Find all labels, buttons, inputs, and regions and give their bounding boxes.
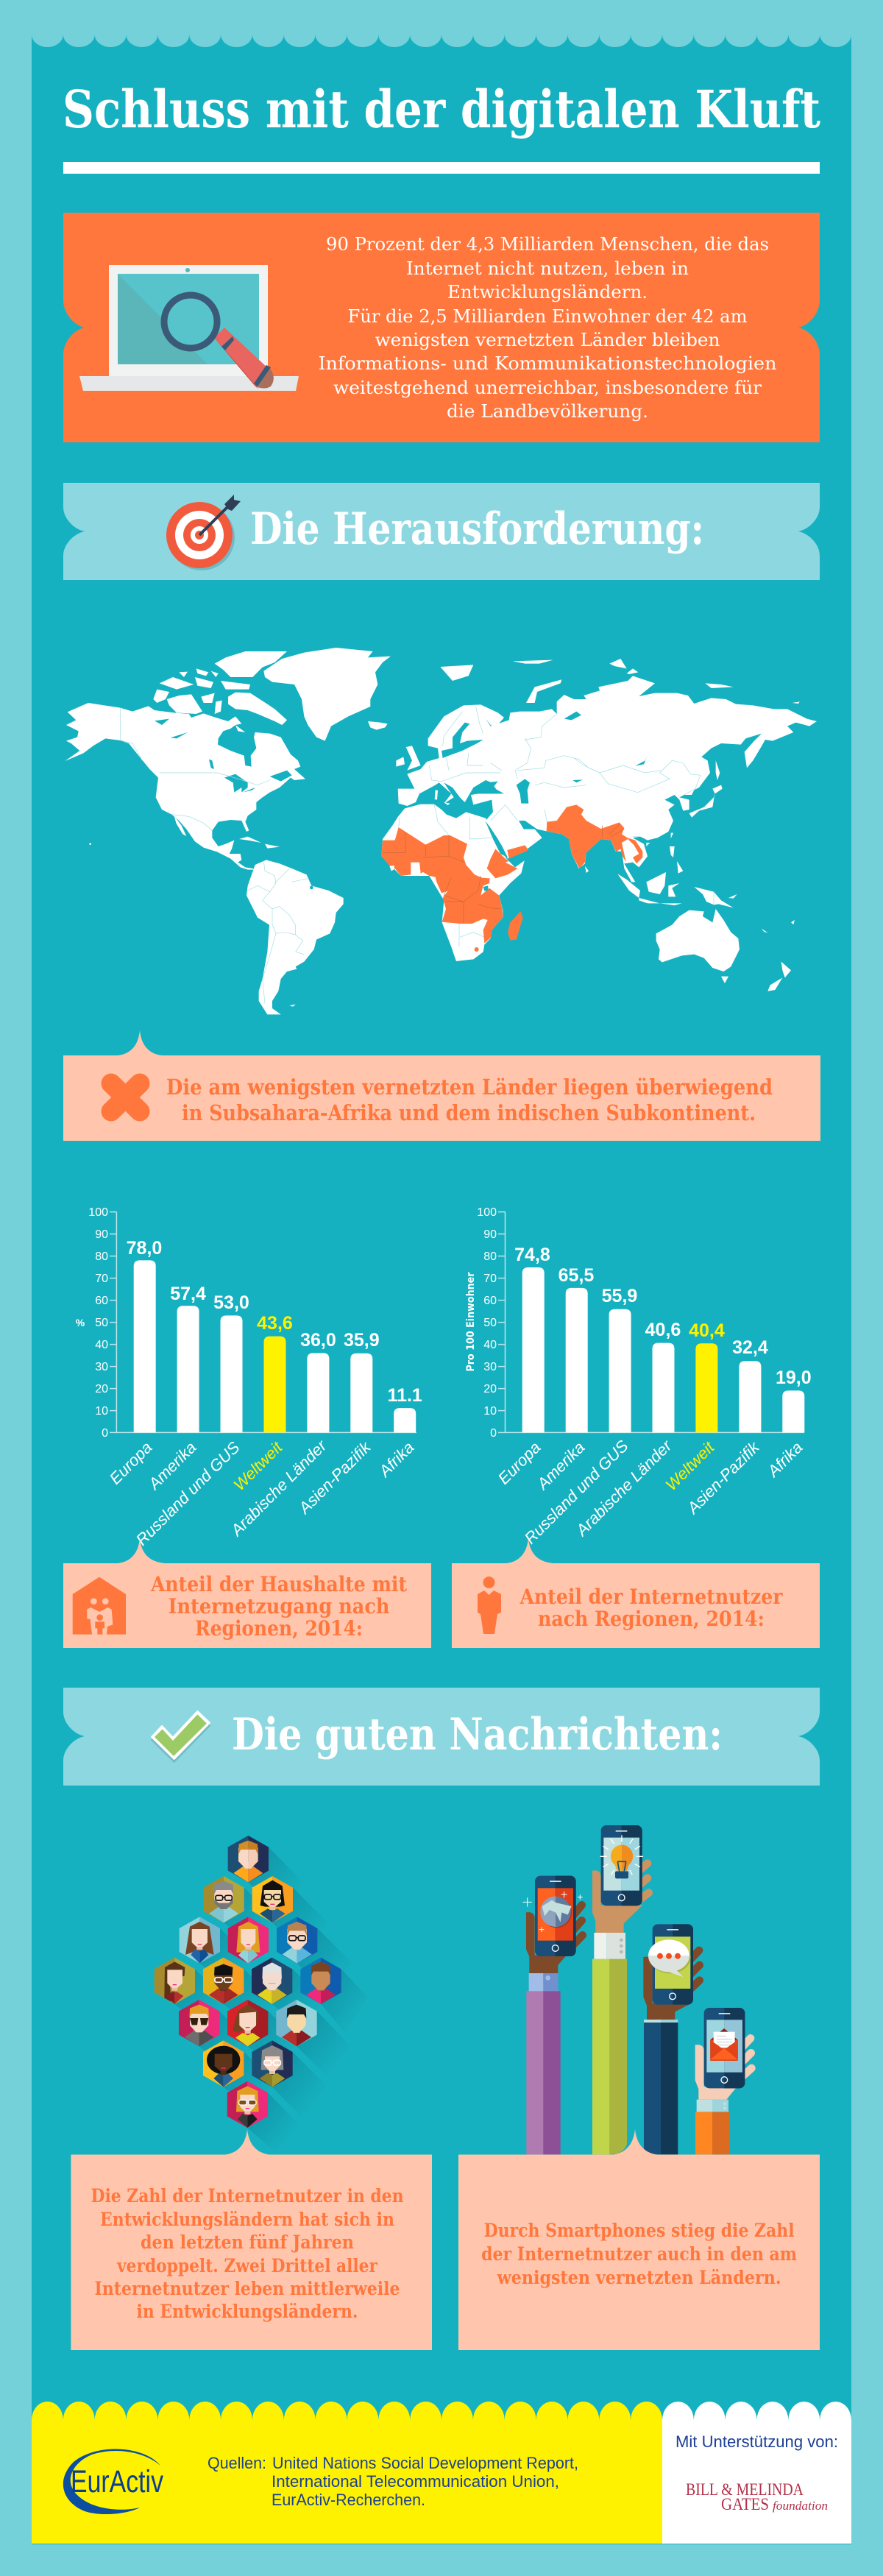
values: 19,0 [776, 1367, 812, 1388]
values [127, 1238, 422, 1406]
icon: laptop with magnifier [79, 265, 299, 391]
text: sources: Quellen: [208, 2454, 266, 2472]
values: 36,0 [300, 1330, 336, 1351]
text: households: Regionen, 2014: [195, 1616, 363, 1641]
person 10 [300, 1958, 341, 2004]
bars [522, 1267, 804, 1432]
bars [134, 1260, 416, 1432]
category labels: Afrika [763, 1438, 806, 1482]
category labels: Russland und GUS [132, 1438, 244, 1549]
world map [65, 648, 817, 1014]
text: map finding: Die am wenigsten vernetzten Länder liegen überwiegend [166, 1075, 773, 1100]
text: intro: weitestgehend unerreichbar, insbesondere für [333, 378, 762, 398]
person 4 [180, 1917, 220, 1964]
values: 43,6 [257, 1313, 293, 1334]
text: intro: Entwicklungsländern. [447, 282, 648, 302]
axis labels: 80 [483, 1250, 497, 1263]
person 1 [228, 1836, 269, 1882]
text: intro: Informations- und Kommunikationstechnologien [318, 353, 777, 374]
axis unit: % [76, 1317, 85, 1328]
text: internet users: Anteil der Internetnutzer [519, 1585, 783, 1609]
category labels: Amerika [143, 1438, 200, 1494]
text: households: Internetzugang nach [168, 1594, 390, 1618]
values: 35,9 [344, 1330, 380, 1351]
callout: map finding [63, 1030, 820, 1141]
category labels [494, 1436, 806, 1548]
axis labels: 80 [95, 1250, 108, 1263]
values: 40,4 [689, 1320, 725, 1341]
values: 55,9 [602, 1286, 637, 1306]
values: 32,4 [732, 1337, 768, 1358]
arm: purple with globe phone [523, 1876, 583, 2154]
top scallop border [32, 33, 851, 47]
axis labels: 60 [95, 1295, 108, 1307]
axis labels: 70 [95, 1273, 108, 1285]
footer [32, 2402, 851, 2544]
axis labels: 10 [483, 1405, 497, 1418]
callout: households [63, 1538, 431, 1648]
axis labels: 0 [490, 1427, 497, 1440]
map: highlighted African countries [381, 827, 528, 952]
axis labels: 40 [483, 1339, 497, 1351]
illustration: raised hands with phones [523, 1825, 751, 2154]
category labels: Arabische Länder [572, 1436, 676, 1540]
footer: white sponsor band [662, 2402, 851, 2544]
category labels [106, 1436, 418, 1549]
category labels: Europa [106, 1438, 156, 1488]
heading: Die guten Nachrichten [63, 1688, 820, 1786]
values: 40,6 [645, 1320, 681, 1340]
axis labels: 60 [483, 1295, 497, 1307]
values: 74,8 [514, 1245, 550, 1265]
category labels: Weltweit [662, 1437, 718, 1494]
text: sources [208, 2454, 578, 2509]
values: 65,5 [558, 1265, 594, 1286]
axis labels: 70 [483, 1273, 497, 1285]
logo: Gates foundation: GATES [721, 2495, 769, 2513]
text: internet users [519, 1585, 783, 1631]
person 7 [155, 1958, 195, 2004]
axis labels: 30 [95, 1361, 108, 1373]
text: sources: United Nations Social Development Report, [272, 2454, 578, 2472]
values [514, 1245, 812, 1388]
person 5 [228, 1917, 269, 1964]
axis labels [88, 1206, 108, 1440]
axis labels: 20 [95, 1383, 108, 1395]
panel: text right [458, 2129, 820, 2350]
person 2 [203, 1876, 244, 1922]
long shadows [174, 1847, 368, 2154]
text: doubled users: in Entwicklungsländern. [137, 2301, 358, 2322]
illustration: people hexagons [155, 1836, 368, 2154]
icon: person [478, 1577, 501, 1634]
arm: orange with mail phone [695, 2008, 751, 2154]
text: smartphones: Durch Smartphones stieg die Zahl [484, 2220, 795, 2241]
text: doubled users [91, 2185, 403, 2322]
heading: Die Herausforderung: Die Herausforderung: [250, 503, 704, 555]
axis labels: 0 [102, 1427, 108, 1440]
title: Schluss mit der digitalen Kluft [63, 79, 820, 140]
values: 53,0 [213, 1292, 249, 1313]
person 16 [227, 2081, 268, 2128]
axis labels: 50 [483, 1317, 497, 1329]
person 13 [276, 2000, 317, 2046]
text: map finding [166, 1075, 773, 1125]
text: sources: EurActiv-Recherchen. [272, 2491, 425, 2509]
logo: Gates foundation [686, 2480, 828, 2513]
map: highlighted South and Southeast Asia [547, 804, 642, 868]
text: internet users: nach Regionen, 2014: [538, 1607, 765, 1631]
map: the Americas and Greenland [65, 648, 391, 1014]
text: intro: Für die 2,5 Milliarden Einwohner der 42 am [347, 306, 748, 327]
axes [498, 1212, 804, 1432]
logo: EurActiv [63, 2449, 163, 2514]
text: doubled users: Die Zahl der Internetnutzer in den [91, 2185, 403, 2207]
icon: house with family [73, 1577, 126, 1635]
chart: households with internet access [76, 1206, 422, 1549]
footer: yellow sources band [32, 2402, 662, 2544]
category labels: Asien-Pazifik [294, 1437, 375, 1518]
axis labels: 90 [483, 1228, 497, 1241]
panel: intro [63, 213, 820, 442]
axis labels: 90 [95, 1228, 108, 1241]
text: intro [318, 234, 777, 422]
text: smartphones: wenigsten vernetzten Ländern. [497, 2267, 781, 2288]
person 15 [252, 2040, 293, 2087]
person 12 [227, 2000, 268, 2046]
category labels: Russland und GUS [521, 1437, 632, 1548]
text: map finding: in Subsahara-Afrika und dem indischen Subkontinent. [182, 1100, 756, 1125]
text: doubled users: den letzten fünf Jahren [141, 2232, 354, 2253]
heading: Die Herausforderung [63, 483, 820, 580]
panel: text left [71, 2129, 432, 2350]
map: East Asia and Oceania [547, 659, 800, 991]
person 11 [179, 2000, 219, 2046]
axis labels: 100 [88, 1206, 108, 1219]
logo: Gates foundation: BILL & MELINDA [686, 2480, 804, 2499]
icon: orange X [111, 1083, 140, 1111]
text: intro: wenigsten vernetzten Länder bleiben [375, 330, 720, 350]
person 9 [252, 1958, 292, 2004]
callout: internet users [452, 1538, 820, 1648]
text: intro: 90 Prozent der 4,3 Milliarden Menschen, die das [326, 234, 769, 255]
category labels: Amerika [532, 1438, 589, 1494]
person 14 [203, 2040, 244, 2087]
category labels: Arabische Länder [227, 1436, 331, 1540]
text: intro: die Landbevölkerung. [447, 401, 648, 422]
arm: green with bulb phone [592, 1825, 649, 2154]
values: 57,4 [170, 1284, 206, 1304]
title rule [63, 162, 820, 174]
person 3 [252, 1876, 293, 1922]
values: 11.1 [388, 1385, 422, 1406]
text: households [150, 1572, 407, 1641]
text: doubled users: Entwicklungsländern hat sich in [100, 2209, 394, 2230]
text: smartphones [481, 2220, 797, 2288]
person 6 [277, 1917, 317, 1964]
text: doubled users: verdoppelt. Zwei Drittel aller [116, 2255, 378, 2276]
axis labels: 40 [95, 1339, 108, 1351]
axis labels: 10 [95, 1405, 108, 1418]
logo: Gates foundation: foundation [773, 2499, 828, 2513]
axis labels: 100 [477, 1206, 497, 1219]
category labels: Europa [494, 1438, 545, 1488]
logo: EurActiv: EurActiv [71, 2464, 163, 2499]
category labels: Asien-Pazifik [683, 1437, 763, 1518]
axes [110, 1212, 416, 1432]
icon: target [166, 495, 241, 570]
category labels: Weltweit [230, 1437, 286, 1494]
heading: Die guten Nachrichten: Die guten Nachrichten: [232, 1709, 723, 1761]
map: Eurasia and Africa [368, 660, 817, 961]
text: smartphones: der Internetnutzer auch in den am [481, 2243, 797, 2265]
chart: internet users [465, 1206, 812, 1548]
text: intro: Internet nicht nutzen, leben in [406, 258, 689, 279]
arm: navy with chat phone [643, 1924, 700, 2154]
values: 78,0 [127, 1238, 162, 1259]
axis labels [477, 1206, 497, 1440]
axis labels: 50 [95, 1317, 108, 1329]
text: sources: International Telecommunication Union, [272, 2472, 559, 2491]
text: sponsor line: Mit Unterstützung von: [675, 2432, 838, 2451]
icon: check mark [152, 1711, 210, 1762]
text: households: Anteil der Haushalte mit [150, 1572, 407, 1596]
axis labels: 20 [483, 1383, 497, 1395]
category labels: Afrika [375, 1438, 418, 1482]
axis labels: 30 [483, 1361, 497, 1373]
person 8 [203, 1958, 244, 2004]
text: doubled users: Internetnutzer leben mittlerweile [94, 2278, 400, 2299]
axis unit: Pro 100 Einwohner [465, 1272, 477, 1372]
